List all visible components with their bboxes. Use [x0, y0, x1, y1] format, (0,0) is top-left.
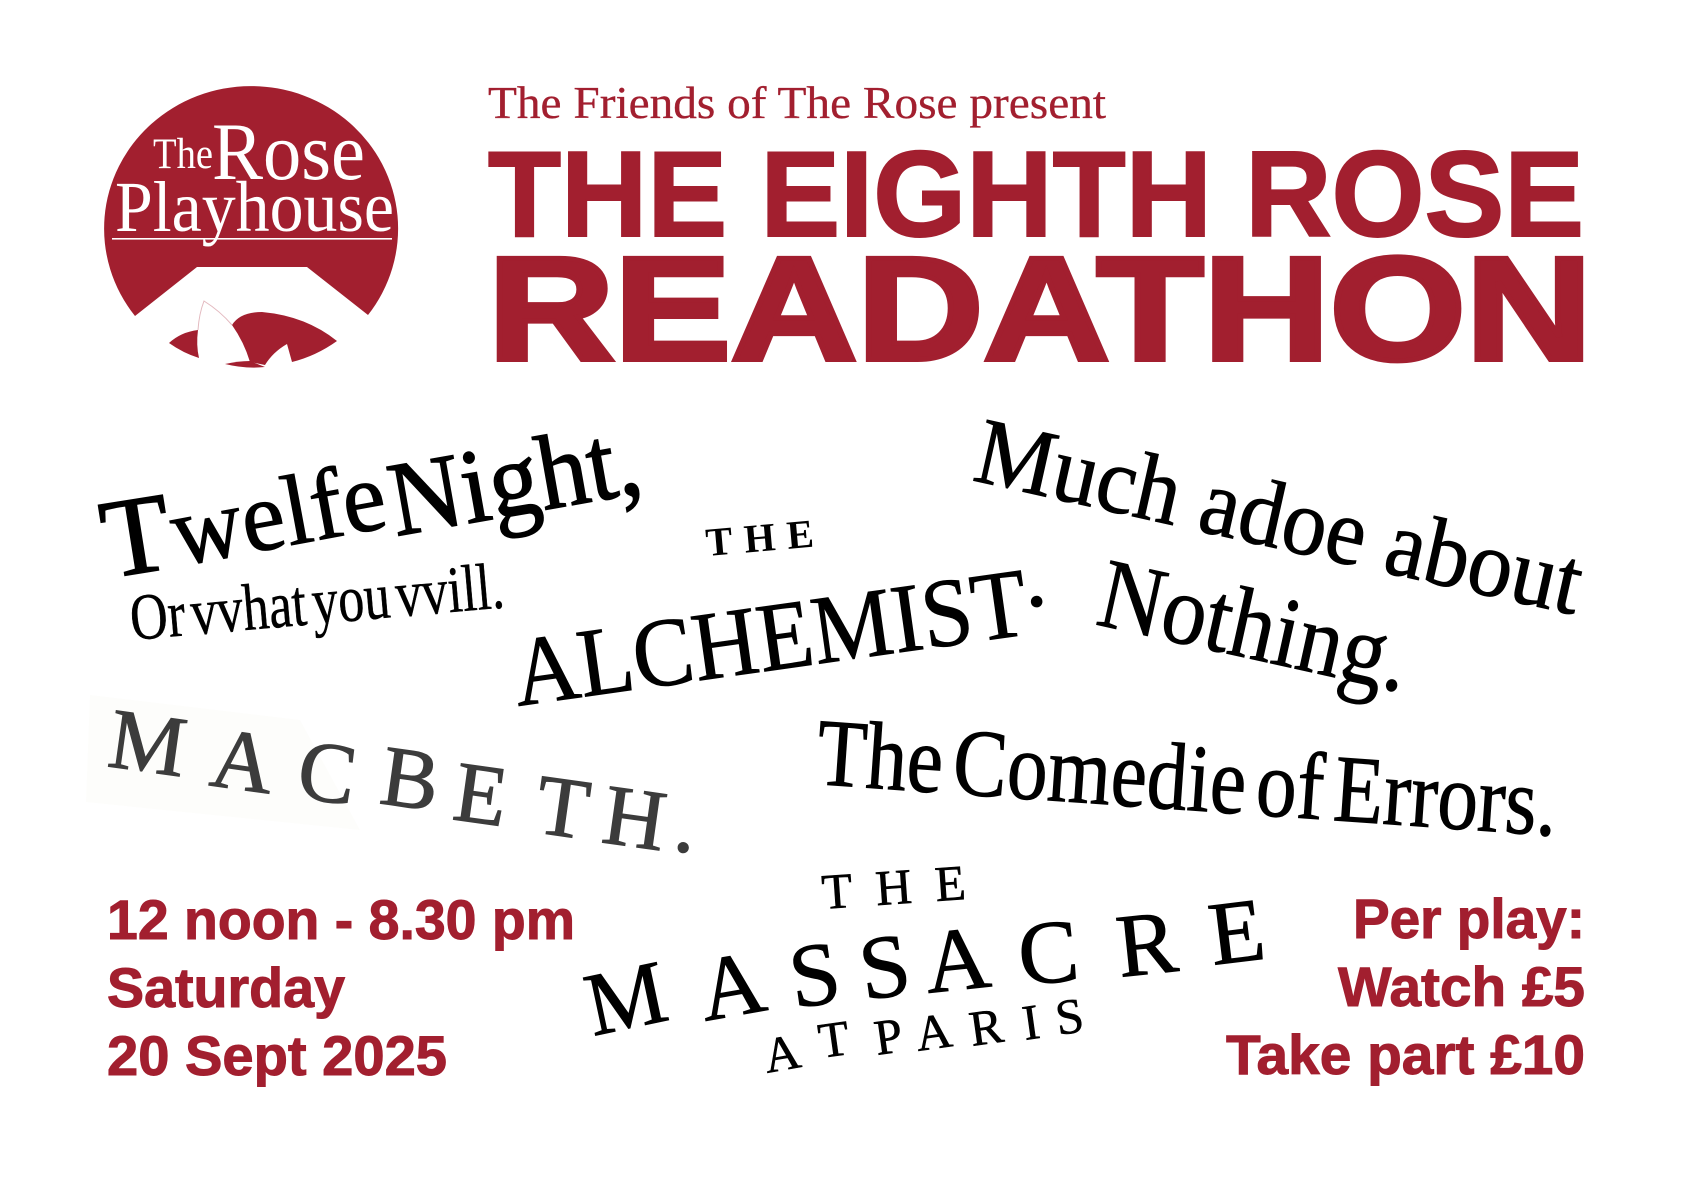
play title: The Alchemist: ·: [1013, 546, 1060, 658]
title: Readathon: READATHON: [488, 228, 1592, 392]
play title: Much Ado About Nothing: Much adoe about: [966, 397, 1593, 635]
play title: Twelfth Night: welfe: [162, 439, 394, 588]
event time and date: 12 noon - 8.30 pm: [107, 888, 575, 951]
event time and date: [107, 888, 575, 1087]
ticket prices: Watch £5: [1338, 955, 1585, 1018]
play title: Much Ado About Nothing: Nothing.: [1089, 537, 1421, 714]
ticket prices: [1226, 887, 1585, 1086]
title: The Eighth Rose: THE EIGHTH ROSE: [488, 126, 1584, 262]
play title: Twelfth Night: T: [93, 470, 179, 603]
ticket prices: Per play:: [1353, 887, 1585, 950]
play title: The Massacre at Paris: MASSACRE: [577, 880, 1270, 1056]
play title: The Alchemist: THE: [704, 511, 815, 565]
logo wordmark: The: [153, 131, 213, 178]
play title: The Massacre at Paris: ATPARIS: [759, 987, 1087, 1084]
play title: Twelfth Night: Or vvhat you vvill.: [127, 550, 507, 655]
logo wordmark: [112, 106, 394, 247]
logo wordmark: Rose: [212, 106, 365, 197]
event time and date: 20 Sept 2025: [107, 1024, 447, 1087]
play title: Twelfth Night: [93, 399, 649, 655]
play title: Twelfth Night: Night,: [380, 399, 649, 559]
logo rose petals: [169, 301, 337, 368]
play title: The Massacre at Paris: THE: [820, 854, 967, 920]
event time and date: Saturday: [107, 956, 345, 1019]
logo wordmark: Playhouse: [115, 167, 394, 247]
play title: The Alchemist: ALCHEMIST: [506, 549, 1034, 728]
play title: The Comedy of Errors: The Comedie of Errors.: [814, 698, 1561, 857]
logo disc: [104, 86, 398, 316]
logo: The Rose Playhouse: [104, 86, 398, 368]
presenter line: The Friends of The Rose present: [488, 78, 1107, 128]
play title: Macbeth: MACBETH.: [103, 690, 704, 872]
ticket prices: Take part £10: [1226, 1023, 1585, 1086]
